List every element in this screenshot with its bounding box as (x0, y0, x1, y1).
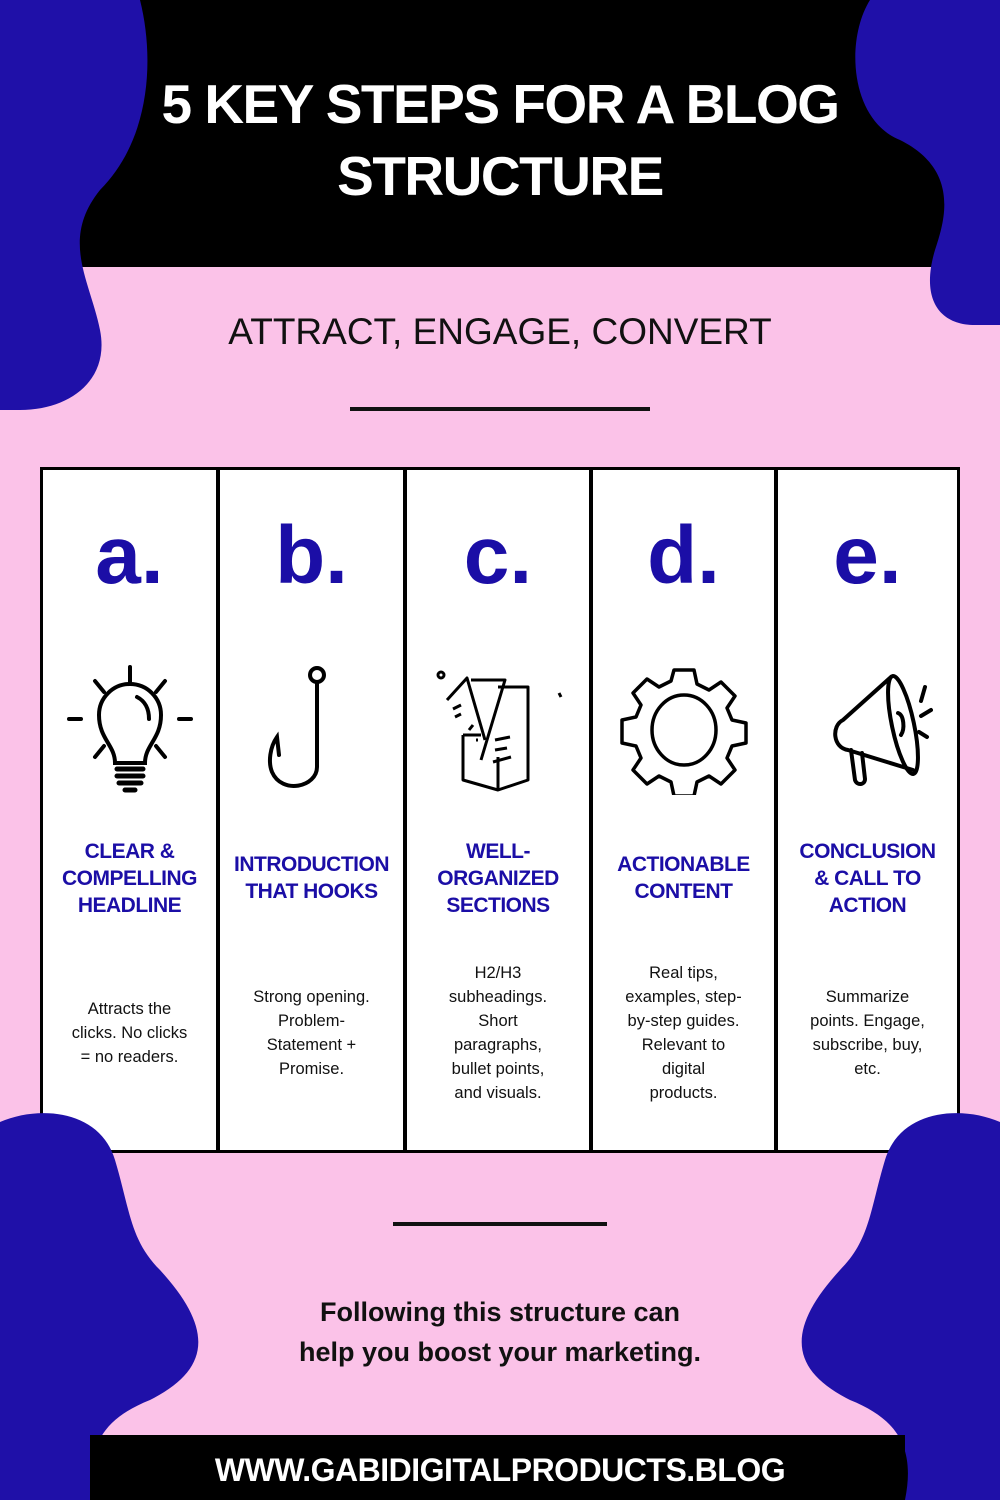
column c: c. (464, 510, 532, 601)
column b: b. (275, 510, 348, 601)
column c: SECTIONS (446, 894, 550, 916)
column e (799, 510, 936, 1078)
column a: = no readers. (81, 1048, 178, 1066)
closing message: Following this structure can (320, 1297, 680, 1327)
column d: ACTIONABLE (617, 853, 750, 876)
title (161, 73, 839, 207)
title: STRUCTURE (337, 145, 663, 207)
column b: Promise. (279, 1060, 344, 1078)
column d: Real tips, (649, 964, 718, 982)
column d: Relevant to (642, 1036, 725, 1054)
column a: clicks. No clicks (72, 1024, 187, 1042)
steps table (40, 467, 960, 1153)
icon: megaphone (833, 674, 933, 786)
column e: ACTION (829, 894, 906, 916)
bottom blobs overlap (0, 1113, 1000, 1500)
column c: Short (478, 1012, 518, 1030)
column a: COMPELLING (62, 866, 197, 890)
column d: products. (650, 1084, 717, 1102)
icon: gear (620, 668, 748, 795)
column d: by-step guides. (628, 1012, 739, 1030)
icon: hook (268, 666, 326, 788)
column e: & CALL TO (814, 866, 921, 890)
column b: THAT HOOKS (245, 880, 378, 903)
column c: and visuals. (454, 1084, 542, 1102)
column e: e. (833, 510, 902, 601)
footer url: WWW.GABIDIGITALPRODUCTS.BLOG (215, 1452, 785, 1488)
column c (407, 470, 593, 1150)
column c: H2/H3 (475, 964, 521, 982)
column c: paragraphs, (454, 1036, 542, 1054)
column b: INTRODUCTION (234, 853, 389, 876)
column c: subheadings. (449, 988, 547, 1006)
column b: Strong opening. (253, 988, 370, 1006)
closing message: help you boost your marketing. (299, 1337, 701, 1367)
title: 5 KEY STEPS FOR A BLOG (161, 73, 839, 135)
column b: Statement + (267, 1036, 356, 1054)
column a: Attracts the (88, 1000, 171, 1018)
column d (593, 470, 778, 1150)
column b: Problem- (278, 1012, 345, 1030)
column d: digital (662, 1060, 705, 1078)
closing message (299, 1297, 701, 1367)
subtitle: ATTRACT, ENGAGE, CONVERT (228, 311, 772, 352)
column d: CONTENT (634, 880, 732, 903)
column e: Summarize (826, 988, 909, 1006)
icon: light bulb (67, 665, 193, 792)
column e: etc. (854, 1060, 881, 1078)
icon: file folder (436, 670, 562, 792)
column d: d. (647, 510, 720, 601)
column e: CONCLUSION (799, 840, 936, 862)
column a: HEADLINE (78, 894, 181, 916)
column a (43, 470, 220, 1150)
column e: points. Engage, (810, 1012, 925, 1030)
column c: WELL- (466, 840, 530, 862)
column c: bullet points, (452, 1060, 544, 1078)
column d: examples, step- (625, 988, 742, 1006)
column c: ORGANIZED (437, 866, 559, 890)
column e: subscribe, buy, (813, 1036, 922, 1054)
column a: CLEAR & (85, 840, 174, 862)
column a: a. (95, 510, 164, 601)
column b (220, 470, 407, 1150)
